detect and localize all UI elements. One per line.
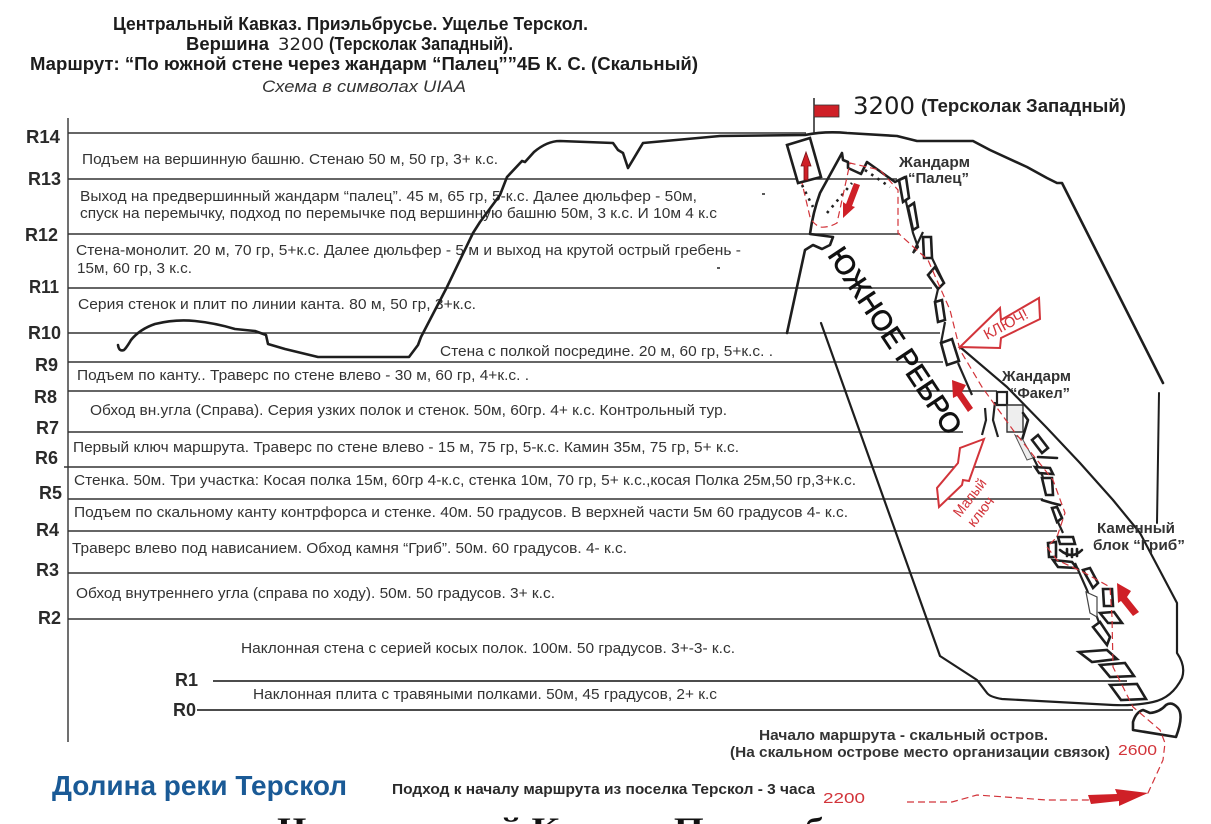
pitch descriptions: Стена-монолит. 20 м, 70 гр, 5+к.с. Далее дюльфер - 5 м и выход на крутой острый гребень - [76, 243, 741, 259]
rock pitch chain [787, 138, 1146, 700]
pitch descriptions: Наклонная стена с серией косых полок. 100м. 50 градусов. 3+-3- к.с. [241, 641, 735, 657]
altitude 2200: 2200 [823, 790, 865, 807]
landmark labels: Жандарм [1001, 369, 1071, 385]
stray specks [717, 194, 765, 268]
pitch labels R0-R14: R6 [35, 448, 58, 468]
pitch descriptions: Стена с полкой посредине. 20 м, 60 гр, 5+к.с. . [440, 344, 773, 360]
landmark labels: Каменный [1097, 521, 1175, 537]
pitch labels R0-R14: R5 [39, 483, 62, 503]
pitch labels R0-R14: R2 [38, 608, 61, 628]
pitch descriptions: 15м, 60 гр, 3 к.с. [77, 261, 192, 277]
title block: 3200 [278, 35, 324, 55]
arrow: descent [843, 183, 860, 218]
pitch labels R0-R14: R4 [36, 520, 59, 540]
pitch labels R0-R14: R9 [35, 355, 58, 375]
callout arrow: small key: Малый [951, 476, 990, 520]
pitch descriptions: Первый ключ маршрута. Траверс по стене влево - 15 м, 75 гр, 5-к.с. Камин 35м, 75 гр, 5+ к.с. [73, 440, 739, 456]
title block [30, 14, 698, 96]
title block: Маршрут: “По южной стене через жандарм “Палец””4Б К. С. (Скальный) [30, 54, 698, 74]
pitch labels R0-R14: R8 [34, 387, 57, 407]
title block: (Терсколак Западный). [329, 34, 513, 54]
pitch descriptions: Подъем по скальному канту контрфорса и стенке. 40м. 50 градусов. В верхней части 5м 60 градусов 4- к.с. [74, 505, 848, 521]
pitch descriptions: Обход внутреннего угла (справа по ходу). 50м. 50 градусов. 3+ к.с. [76, 586, 555, 602]
pitch labels R0-R14 [25, 127, 198, 720]
pitch descriptions [72, 152, 856, 703]
pitch descriptions: Траверс влево под нависанием. Обход камня “Гриб”. 50м. 60 градусов. 4- к.с. [72, 541, 627, 557]
pitch labels R0-R14: R7 [36, 418, 59, 438]
landmark labels [898, 155, 1185, 554]
pitch labels R0-R14: R11 [29, 277, 59, 297]
pitch descriptions: Подъем по канту.. Траверс по стене влево - 30 м, 60 гр, 4+к.с. . [77, 368, 529, 384]
landmark labels: Жандарм [898, 155, 970, 171]
pitch descriptions: Выход на предвершинный жандарм “палец”. 45 м, 65 гр, 5-к.с. Далее дюльфер - 50м, [80, 189, 697, 205]
callout arrow: key: КЛЮЧ! [981, 306, 1031, 344]
title block: Схема в символах UIAA [262, 77, 466, 96]
flag: summit [814, 98, 839, 134]
pitch descriptions: Наклонная плита с травяными полками. 50м, 45 градусов, 2+ к.с [253, 687, 717, 703]
pitch descriptions: Стенка. 50м. Три участка: Косая полка 15м, 60гр 4-к.с, стенка 10м, 70 гр, 5+ к.с.,косая Полка 25м,50 гр,3+к.с. [74, 473, 856, 489]
callout arrow: small key [937, 439, 998, 530]
pitch labels R0-R14: R13 [28, 169, 61, 189]
pitch labels R0-R14: R10 [28, 323, 61, 343]
summit label [853, 92, 1126, 120]
pitch labels R0-R14: R0 [173, 700, 196, 720]
arrow: approach [1088, 789, 1148, 806]
approach note: Подход к началу маршрута из поселка Терскол - 3 часа [392, 781, 816, 798]
pitch labels R0-R14: R1 [175, 670, 198, 690]
title block: Центральный Кавказ. Приэльбрусье. Ущелье Терскол. [113, 14, 588, 34]
rib name: ЮЖНОЕ РЕБРО [822, 241, 968, 440]
start of route note: Начало маршрута - скальный остров. [759, 728, 1048, 744]
pitch labels R0-R14: R14 [26, 127, 60, 147]
pitch labels R0-R14: R3 [36, 560, 59, 580]
callout arrow: key [960, 298, 1040, 348]
title block: Вершина [186, 34, 270, 54]
pitch labels R0-R14: R12 [25, 225, 58, 245]
start of route note: (На скальном острове место организации связок) [730, 745, 1110, 761]
mountain outline [118, 132, 1183, 737]
landmark labels: “Факел” [1010, 386, 1070, 402]
arrow: middle ascent [952, 380, 973, 412]
arrow: lower ascent [1117, 583, 1139, 616]
landmark labels: “Палец” [908, 171, 969, 187]
summit label: 3200 [853, 92, 915, 120]
pitch descriptions: Серия стенок и плит по линии канта. 80 м, 50 гр, 3+к.с. [78, 297, 476, 313]
pitch descriptions: Обход вн.угла (Справа). Серия узких полок и стенок. 50м, 60гр. 4+ к.с. Контрольный тур. [90, 403, 727, 419]
altitude 2600: 2600 [1118, 742, 1157, 759]
dotted descent line [802, 170, 890, 213]
pitch descriptions: спуск на перемычку, подход по перемычке под вершинную башню 50м, 3 к.с. И 10м 4 к.с [80, 206, 717, 222]
arrow: up on summit tower [801, 152, 811, 180]
start of route note [730, 728, 1110, 761]
pitch grid lines [64, 118, 1133, 742]
callout arrow: small key: ключ [965, 494, 998, 530]
pitch descriptions: Подъем на вершинную башню. Стенаю 50 м, 50 гр, 3+ к.с. [82, 152, 498, 168]
red dashed route [802, 163, 1165, 802]
valley name: Долина реки Терскол [52, 770, 347, 801]
summit label: (Терсколак Западный) [921, 96, 1126, 116]
landmark labels: блок “Гриб” [1093, 538, 1185, 554]
